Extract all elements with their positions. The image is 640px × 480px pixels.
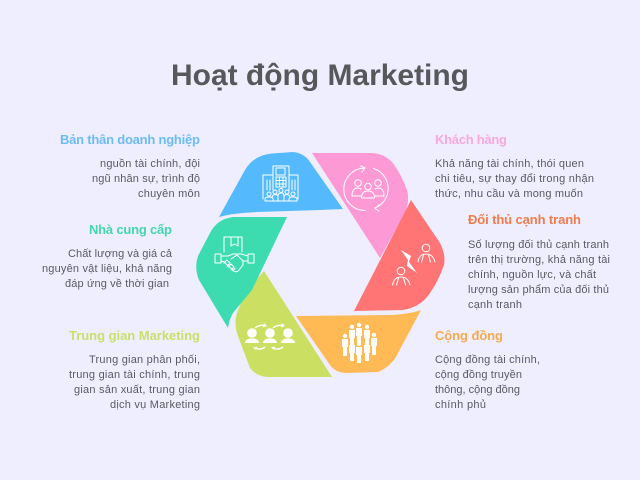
text block: Đối thủ cạnh tranh: Số lượng đối thủ cạnh tranh (468, 239, 609, 251)
text block: Khách hàng (435, 132, 594, 200)
icon: crowd of people (342, 323, 377, 363)
segment: orange, community (296, 310, 421, 373)
text block: Bản thân doanh nghiệp: nguồn tài chính, đội (100, 158, 200, 170)
text block: Đối thủ cạnh tranh (468, 212, 610, 311)
text block: Cộng đồng: chính phủ (435, 399, 486, 411)
text block: Đối thủ cạnh tranh: trên thị trường, khả năng tài (468, 254, 610, 266)
segment: lime, marketing intermediaries (236, 271, 332, 377)
text block: Cộng đồng: cộng đồng truyền (435, 369, 522, 381)
text block: Cộng đồng: Cộng đồng (435, 328, 503, 343)
text block: Bản thân doanh nghiệp: ngũ nhân sự, trình độ (92, 173, 200, 185)
text block: Trung gian Marketing: Trung gian phân phối, (89, 354, 200, 366)
segment: teal, suppliers (196, 217, 287, 328)
text block: Khách hàng: chi tiêu, sự thay đổi trong nhận (435, 173, 594, 185)
text block: Nhà cung cấp: Nhà cung cấp (89, 222, 172, 237)
text block: Trung gian Marketing: gian sản xuất, trung gian (74, 384, 200, 396)
text block: Đối thủ cạnh tranh: Đối thủ cạnh tranh (468, 212, 581, 227)
text block: Cộng đồng: thông, cộng đồng (435, 384, 520, 396)
text block: Cộng đồng: Cộng đồng tài chính, (435, 354, 540, 366)
text block: Nhà cung cấp: Chất lượng và giá cả (68, 248, 173, 260)
text block: Nhà cung cấp: nguyên vật liệu, khả năng (42, 263, 172, 275)
segment: red, competitors (354, 200, 444, 311)
text block: Bản thân doanh nghiệp: Bản thân doanh nghiệp (60, 132, 200, 147)
segment: pink, customers (312, 153, 408, 258)
text block: Bản thân doanh nghiệp (60, 132, 200, 200)
text block: Trung gian Marketing: Trung gian Marketing (69, 328, 200, 343)
text block: Nhà cung cấp: đáp ứng về thời gian (65, 278, 169, 290)
segment: blue, business itself (219, 152, 343, 217)
text block: Trung gian Marketing: trung gian tài chính, trung (69, 369, 200, 381)
icon: office building and people (263, 166, 298, 201)
icon: competitors in conflict (392, 244, 435, 285)
text block: Khách hàng: thức, nhu cầu và mong muốn (435, 188, 583, 200)
text block: Trung gian Marketing: dịch vụ Marketing (110, 399, 200, 411)
text block: Trung gian Marketing (69, 328, 200, 411)
title: Hoạt động Marketing (171, 59, 469, 92)
icon: rotating customer group (344, 166, 388, 211)
text block: Đối thủ cạnh tranh: cạnh tranh (468, 299, 522, 311)
text block: Nhà cung cấp (42, 222, 173, 290)
text block: Bản thân doanh nghiệp: chuyên môn (138, 188, 200, 200)
icon: people exchanging arrows (245, 323, 295, 350)
text block: Cộng đồng (435, 328, 540, 411)
hexagon cycle diagram (196, 152, 444, 377)
icon: handshake and package (215, 237, 254, 272)
text block: Khách hàng: Khả năng tài chính, thói quen (435, 158, 584, 170)
text block: Khách hàng: Khách hàng (435, 132, 507, 147)
text block: Đối thủ cạnh tranh: chính, nguồn lực, và chất (468, 269, 596, 281)
text block: Đối thủ cạnh tranh: lượng sản phẩm của đối thủ (468, 284, 609, 296)
